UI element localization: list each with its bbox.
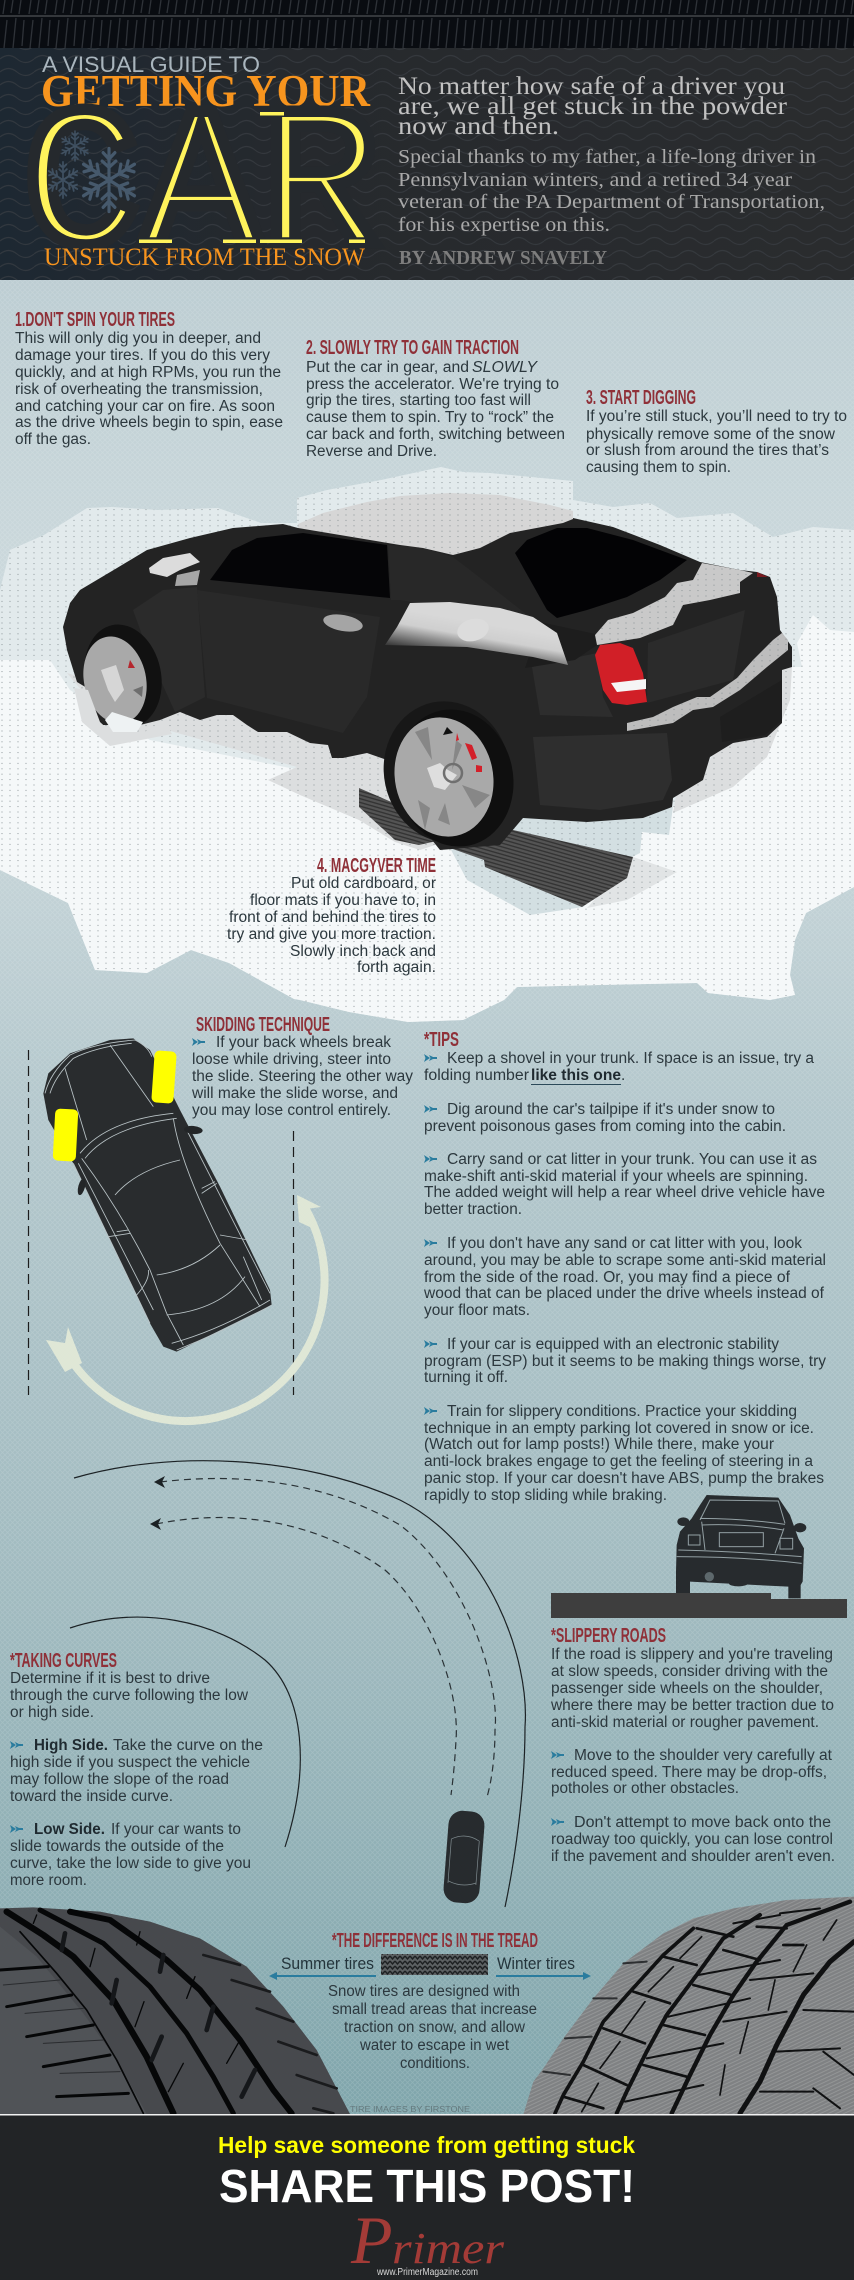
text: step 1: damage your tires. If you do this very: [15, 347, 270, 364]
text: step 3: [586, 408, 847, 476]
text: step 3: physically remove some of the snow: [586, 426, 836, 443]
dashed path: lower: [156, 1518, 456, 1795]
text: taking curves: If your car wants to: [111, 1821, 241, 1838]
snow shadow: gray around car: [67, 667, 792, 850]
tread difference: [269, 1930, 591, 2114]
step 2: [306, 337, 565, 460]
text: slippery roads: at slow speeds, consider driving with the: [551, 1663, 828, 1680]
snow on hood: [149, 553, 200, 577]
slippery roads: [550, 1625, 835, 1865]
car top view: [43, 1038, 272, 1352]
rear wheel: [384, 698, 526, 858]
snow shadow: right of mat: [587, 857, 677, 908]
title: a visual guide to: A VISUAL GUIDE TO: [42, 52, 260, 77]
thanks text: Special thanks to my father, a life-long driver in: [398, 146, 816, 168]
text: slippery roads: passenger side wheels on the shoulder,: [551, 1680, 823, 1697]
floor mat: behind wheel: [359, 788, 441, 845]
tips: [423, 1029, 826, 1504]
guide lines: [28, 1050, 294, 1395]
logo: primer: P: [350, 2202, 393, 2278]
car body: [63, 518, 792, 850]
text: tips: wood that can be placed under the drive wheels instead of: [423, 1285, 825, 1302]
text: skidding: [191, 1034, 413, 1119]
heading: tread: *THE DIFFERENCE IS IN THE TREAD: [332, 1930, 538, 1952]
text: taking curves: curve, take the low side to give you: [10, 1855, 251, 1872]
icon: tread strip: [381, 1954, 488, 1975]
text: tips: technique in an empty parking lot covered in snow or ice.: [424, 1420, 814, 1437]
mirror: [175, 570, 200, 586]
snow: blue patch under mat: [450, 807, 673, 915]
text: step 3: causing them to spin.: [586, 459, 731, 476]
text: skidding: will make the slide worse, and: [191, 1085, 398, 1102]
thanks text: veteran of the PA Department of Transportation,: [398, 191, 825, 213]
text: tips: [423, 1050, 826, 1504]
text: tips: Keep a shovel in your trunk. If space is an issue, try a: [447, 1050, 814, 1067]
icon: car from behind on road: [676, 1495, 806, 1598]
byline: BY ANDREW SNAVELY: [399, 247, 608, 269]
heading: taking curves: *TAKING CURVES: [10, 1650, 117, 1672]
text: tips: .: [621, 1067, 625, 1084]
window: side: [210, 533, 390, 598]
text: taking curves: Low Side.: [34, 1821, 105, 1838]
panel: title header: [0, 48, 854, 304]
text: slippery roads: If the road is slippery and you're traveling: [551, 1646, 833, 1663]
door handle: [322, 612, 364, 634]
text: step 3: or slush from around the tires that’s: [586, 442, 829, 459]
intro text: No matter how safe of a driver you: [398, 73, 786, 100]
snow: white lower drift: [0, 615, 854, 1022]
text: tips: If your car is equipped with an electronic stability: [447, 1336, 779, 1353]
text: step 4: floor mats if you have to, in: [250, 892, 436, 909]
intro text: now and then.: [398, 113, 559, 140]
heading: step 3: 3. START DIGGING: [586, 387, 696, 409]
text: tips: Carry sand or cat litter in your trunk. You can use it as: [447, 1151, 817, 1168]
logo url: www.PrimerMagazine.com: [376, 2267, 478, 2278]
snow dot texture: [0, 467, 854, 1022]
text: tips: panic stop. If your car doesn't have ABS, pump the brakes: [424, 1470, 824, 1487]
text: taking curves: slide towards the outside of the: [10, 1838, 224, 1855]
road edge: outer: [74, 1461, 525, 1907]
text: step 1: quickly, and at high RPMs, you run the: [15, 364, 281, 381]
step 4: [227, 855, 436, 976]
title: getting your: GETTING YOUR: [41, 66, 370, 116]
text: taking curves: [10, 1670, 263, 1889]
text: tread: small tread areas that increase: [332, 2001, 537, 2018]
text: step 1: risk of overheating the transmission,: [15, 381, 263, 398]
text: tread: water to escape in wet: [359, 2037, 510, 2054]
title: unstuck from the snow: UNSTUCK FROM THE SNOW: [44, 244, 365, 271]
text: step 1: [15, 330, 283, 448]
floor mat: front of wheel: [450, 830, 633, 907]
text: slippery roads: Move to the shoulder very carefully at: [574, 1747, 833, 1764]
logo: primer: [350, 2202, 505, 2278]
text: step 1: as the drive wheels begin to spin, ease: [15, 414, 283, 431]
intro text: [398, 73, 788, 140]
text: taking curves: toward the inside curve.: [10, 1788, 173, 1805]
text: skidding: loose while driving, steer into: [192, 1051, 391, 1068]
text: taking curves: or high side.: [10, 1704, 94, 1721]
header band: tire tread: [0, 0, 854, 48]
footer: share heading: SHARE THIS POST!: [219, 2160, 635, 2212]
label: summer tires: Summer tires: [281, 1954, 374, 1973]
image: summer tire: [0, 1907, 350, 2114]
text: slippery roads: Don't attempt to move back onto the: [574, 1814, 831, 1831]
text: tips: If you don't have any sand or cat litter with you, look: [447, 1235, 802, 1252]
thanks text: [398, 146, 825, 236]
text: tips: turning it off.: [424, 1369, 508, 1386]
snow on rear deck: [595, 563, 753, 645]
heading: step 4: 4. MACGYVER TIME: [317, 855, 436, 877]
tail light white bar: [611, 679, 646, 692]
title: car: CAR: [22, 77, 380, 304]
curves bullets: [10, 1741, 23, 1833]
text: step 3: If you’re still stuck, you’ll need to try to: [586, 408, 847, 425]
text: slippery roads: if the pavement and shoulder aren't even.: [551, 1848, 835, 1865]
text: slippery roads: potholes or other obstacles.: [551, 1780, 739, 1797]
intro text: are, we all get stuck in the powder: [398, 93, 788, 120]
text: tread: Snow tires are designed with: [328, 1983, 520, 2000]
text: step 2: [306, 359, 565, 460]
text: tips: (Watch out for lamp posts!) While there, make your: [424, 1436, 774, 1453]
slippery bullets: [551, 1751, 564, 1826]
text: step 2: SLOWLY: [472, 359, 539, 376]
text: tips: The added weight will help a rear wheel drive vehicle have: [424, 1184, 825, 1201]
text: tips: from the side of the road. Or, you may find a piece of: [424, 1269, 791, 1286]
footer: [0, 2114, 854, 2280]
heading: skidding: SKIDDING TECHNIQUE: [196, 1014, 330, 1036]
gas cap in snow: [455, 615, 491, 645]
tail light tip: [757, 572, 768, 577]
text: taking curves: more room.: [10, 1872, 87, 1889]
step 3: [586, 387, 847, 476]
text: step 2: Reverse and Drive.: [306, 443, 437, 460]
dashed path: upper: [160, 1479, 495, 1797]
window: rear: [515, 528, 687, 618]
front wheel: [74, 617, 172, 746]
icon: bullet: [192, 1038, 205, 1046]
text: step 4: [227, 875, 436, 976]
text: tips: make-shift anti-skid material if your wheels are spinning.: [424, 1168, 808, 1185]
snow on roof: [298, 493, 573, 555]
text: slippery roads: reduced speed. There may be drop-offs,: [551, 1764, 827, 1781]
credit: TIRE IMAGES BY FIRSTONE: [350, 2104, 470, 2114]
snow on door: [385, 602, 568, 665]
step 1: [15, 309, 283, 448]
snow on bumper: [627, 633, 788, 731]
icon: small car on road: [443, 1810, 485, 1904]
text: step 4: front of and behind the tires to: [229, 909, 436, 926]
text: step 1: and catching your car on fire. As soon: [15, 398, 275, 415]
text: step 2: press the accelerator. We're trying to: [306, 376, 559, 393]
text: tips: anti-lock brakes engage to get the feeling of steering in a: [424, 1453, 813, 1470]
wheel arch rear: [371, 689, 523, 855]
footer: call out: Help save someone from getting stuck: [218, 2132, 635, 2158]
taking curves: [10, 1650, 263, 1889]
skidding technique: [191, 1014, 413, 1119]
wheel: rear yellow: [53, 1108, 78, 1162]
road block: [551, 1593, 847, 1618]
text: taking curves: high side if you suspect the vehicle: [10, 1754, 250, 1771]
text: skidding: the slide. Steering the other way: [192, 1068, 413, 1085]
arrowheads: [150, 1476, 165, 1530]
text: taking curves: Determine if it is best to drive: [10, 1670, 210, 1687]
icon: snowflakes: [47, 131, 138, 212]
tip bullets: [424, 1054, 437, 1415]
text: step 1: off the gas.: [15, 431, 91, 448]
text: taking curves: High Side.: [34, 1737, 108, 1754]
diagram: skidding car: [28, 1038, 325, 1421]
text: tips: better traction.: [424, 1201, 522, 1218]
heading: step 1: 1.DON'T SPIN YOUR TIRES: [15, 309, 175, 331]
image: winter tire: [523, 1897, 854, 2114]
text: skidding: you may lose control entirely.: [192, 1102, 391, 1119]
text: tread: traction on snow, and allow: [344, 2019, 526, 2036]
road edge: inner: [70, 1617, 300, 1847]
text: slippery roads: [550, 1646, 835, 1865]
text: step 4: try and give you more traction.: [227, 926, 436, 943]
arrow: rotation arc: [46, 1195, 325, 1421]
wheel: front yellow: [151, 1050, 177, 1104]
text: tips: folding number: [424, 1067, 529, 1084]
thanks text: Pennsylvanian winters, and a retired 34 year: [398, 169, 792, 191]
arrow: to summer tires: [269, 1972, 376, 1980]
text: step 4: Slowly inch back and: [290, 943, 436, 960]
heading: slippery roads: *SLIPPERY ROADS: [551, 1625, 666, 1647]
thanks text: for his expertise on this.: [398, 214, 610, 236]
text: tread: conditions.: [400, 2055, 470, 2072]
snow field: [0, 467, 854, 1022]
text: taking curves: Take the curve on the: [113, 1737, 263, 1754]
text: slippery roads: roadway too quickly, you can lose control: [551, 1831, 833, 1848]
car letter slab feet: [139, 112, 365, 243]
arrow: to winter tires: [496, 1972, 591, 1980]
label: winter tires: Winter tires: [497, 1954, 575, 1973]
text: step 4: Put old cardboard, or: [291, 875, 436, 892]
text: step 2: grip the tires, starting too fast will: [306, 392, 531, 409]
text: tips: program (ESP) but it seems to be making things worse, try: [424, 1353, 826, 1370]
heading: tips: *TIPS: [424, 1029, 459, 1051]
illustration: black car stuck in snow: [63, 493, 792, 907]
text: taking curves: may follow the slope of the road: [10, 1771, 229, 1788]
text: tips: Dig around the car's tailpipe if it's under snow to: [447, 1101, 775, 1118]
text: tips: rapidly to stop sliding while braking.: [424, 1487, 667, 1504]
logo: primer: rimer: [392, 2224, 505, 2273]
text: tips: your floor mats.: [424, 1302, 530, 1319]
text: step 2: car back and forth, switching between: [306, 426, 565, 443]
text: step 4: forth again.: [357, 959, 436, 976]
tail light: [595, 643, 647, 705]
text: step 2: Put the car in gear, and: [306, 359, 469, 376]
text: step 2: cause them to spin. Try to “rock” the: [306, 409, 554, 426]
text: slippery roads: anti-skid material or rougher pavement.: [551, 1714, 819, 1731]
text: skidding: If your back wheels break: [216, 1034, 391, 1051]
text: slippery roads: where there may be better traction due to: [550, 1697, 834, 1714]
heading: step 2: 2. SLOWLY TRY TO GAIN TRACTION: [306, 337, 519, 359]
text: tread: [328, 1983, 537, 2072]
car body panels: [133, 545, 782, 810]
text: step 1: This will only dig you in deeper, and: [15, 330, 261, 347]
text: tips: like this one: [531, 1067, 621, 1084]
text: taking curves: through the curve following the low: [10, 1687, 249, 1704]
text: tips: prevent poisonous gases from coming into the cabin.: [424, 1118, 786, 1135]
diagram: road curve: [70, 1461, 525, 1907]
text: tips: around, you may be able to scrape some anti-skid material: [424, 1252, 826, 1269]
text: tips: Train for slippery conditions. Practice your skidding: [447, 1403, 797, 1420]
